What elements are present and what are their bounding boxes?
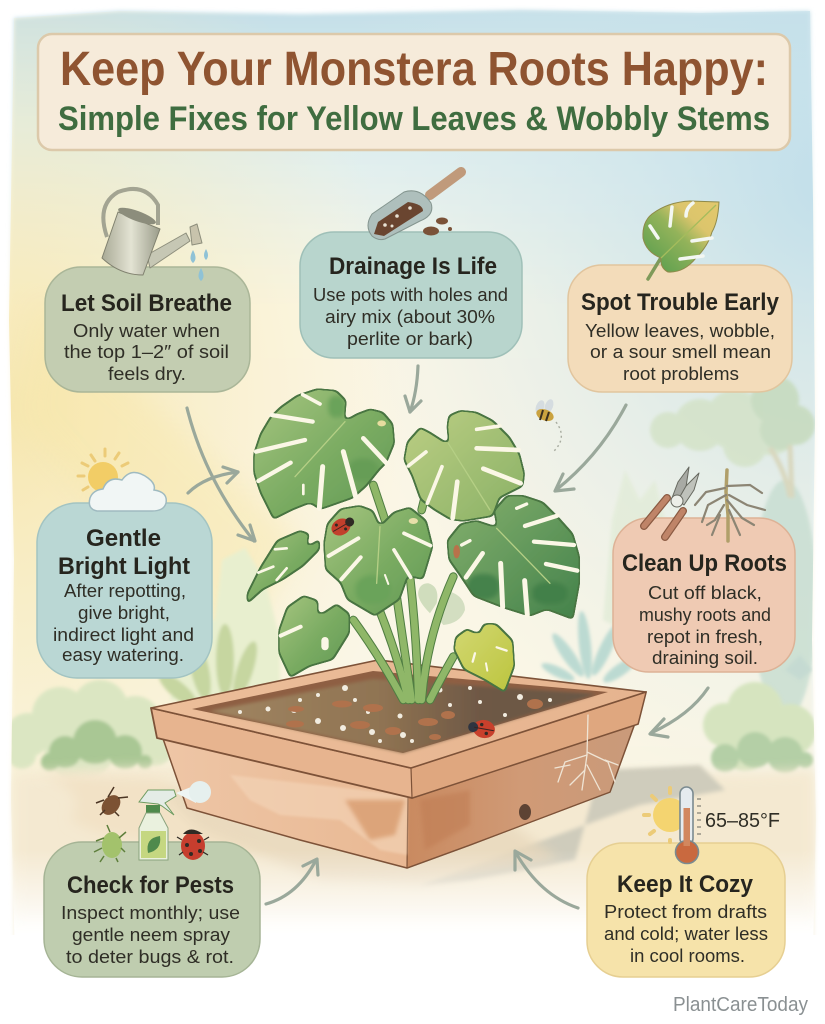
body text: Yellow leaves, wobble,	[585, 321, 775, 341]
body text: gentle neem spray	[72, 925, 230, 945]
terracotta pot	[151, 660, 646, 868]
heading: Drainage Is Life	[329, 253, 497, 280]
icon: monstera leaf	[643, 201, 719, 279]
arrow: drainage to plant	[405, 366, 421, 412]
icon: ladybug on pot	[467, 717, 496, 740]
arrow: roots to pot	[650, 688, 708, 737]
title heading: Keep Your Monstera Roots Happy:	[60, 43, 768, 96]
panel: keep it cozy	[587, 843, 785, 977]
monstera plant	[247, 388, 580, 700]
body text: in cool rooms.	[630, 946, 745, 966]
body text	[604, 902, 768, 966]
soil	[210, 679, 596, 753]
icon: pruners	[644, 467, 699, 537]
body text: mushy roots and	[639, 605, 771, 625]
heading: Keep It Cozy	[617, 871, 754, 898]
body text: Inspect monthly; use	[61, 903, 240, 923]
body text: Only water when	[73, 321, 220, 341]
icon: green aphid	[94, 825, 126, 862]
panel: let soil breathe	[45, 267, 250, 392]
icon: spray bottle	[139, 781, 211, 860]
body text	[53, 581, 194, 665]
body text: to deter bugs & rot.	[66, 947, 234, 967]
arrow: soil to plant	[187, 408, 255, 541]
icon: ladybug on leaf	[328, 513, 358, 539]
body text: root problems	[623, 364, 739, 384]
panel: spot trouble early	[568, 265, 792, 392]
body text	[313, 285, 508, 349]
icon: brown beetle	[96, 787, 128, 819]
arrow: trouble to plant	[555, 405, 626, 491]
body text: or a sour smell mean	[590, 342, 771, 362]
body text: and cold; water less	[604, 924, 768, 944]
icon: scoop	[368, 172, 461, 240]
title banner	[38, 34, 790, 150]
leaf: small left	[247, 530, 320, 605]
icon: bee	[534, 398, 561, 452]
body text: After repotting,	[64, 581, 186, 601]
heading: Clean Up Roots	[622, 550, 787, 577]
panel: gentle bright light	[37, 503, 212, 678]
leaf: lower left	[278, 595, 350, 678]
body text: Protect from drafts	[604, 902, 767, 922]
leaf: top right	[403, 410, 525, 522]
arrow: light to plant	[188, 467, 238, 493]
temperature label: 65–85°F	[705, 810, 780, 832]
body text: easy watering.	[62, 645, 184, 665]
ground	[12, 760, 816, 890]
icon: sun and cloud	[78, 449, 166, 511]
background: left hills	[6, 548, 816, 781]
heading: Spot Trouble Early	[581, 289, 780, 316]
icon: ladybug	[177, 830, 209, 860]
icon: sun and thermometer	[644, 787, 701, 864]
leaf: top left	[253, 388, 395, 520]
body text: feels dry.	[108, 364, 186, 384]
body text: indirect light and	[53, 625, 194, 645]
background: tree right	[603, 376, 817, 720]
pot root stain	[555, 715, 618, 790]
back faint leaves	[418, 583, 465, 625]
heading: Bright Light	[58, 553, 190, 580]
body text: perlite or bark)	[347, 329, 473, 349]
panel: check for pests	[44, 842, 260, 977]
heading: Check for Pests	[67, 872, 234, 899]
body text: Use pots with holes and	[313, 285, 508, 305]
heading	[58, 525, 190, 580]
body text: airy mix (about 30%	[325, 307, 495, 327]
heading: Gentle	[86, 525, 161, 552]
subtitle: Simple Fixes for Yellow Leaves & Wobbly Stems	[58, 100, 770, 138]
body text: draining soil.	[652, 648, 758, 668]
body text: repot in fresh,	[647, 627, 763, 647]
body text	[585, 321, 775, 384]
icon: watering can	[102, 189, 208, 281]
body text: the top 1–2″ of soil	[64, 342, 229, 362]
leaf: middle	[323, 505, 433, 617]
icon: roots	[695, 470, 765, 541]
pot drain hole	[519, 804, 531, 820]
body text	[639, 583, 771, 668]
body text: Cut off black,	[648, 583, 762, 603]
panel: drainage is life	[300, 232, 522, 358]
arrow: pests to pot	[266, 859, 318, 904]
leaf: right large	[447, 495, 580, 620]
body text	[64, 321, 229, 384]
stems	[353, 477, 453, 700]
heading: Let Soil Breathe	[61, 290, 232, 317]
arrow: cozy to pot	[515, 851, 578, 908]
panel: clean up roots	[613, 518, 795, 672]
body text	[61, 903, 240, 967]
body text: give bright,	[78, 603, 170, 623]
watermark: PlantCareToday	[673, 994, 808, 1016]
leaf: yellow	[453, 623, 515, 693]
